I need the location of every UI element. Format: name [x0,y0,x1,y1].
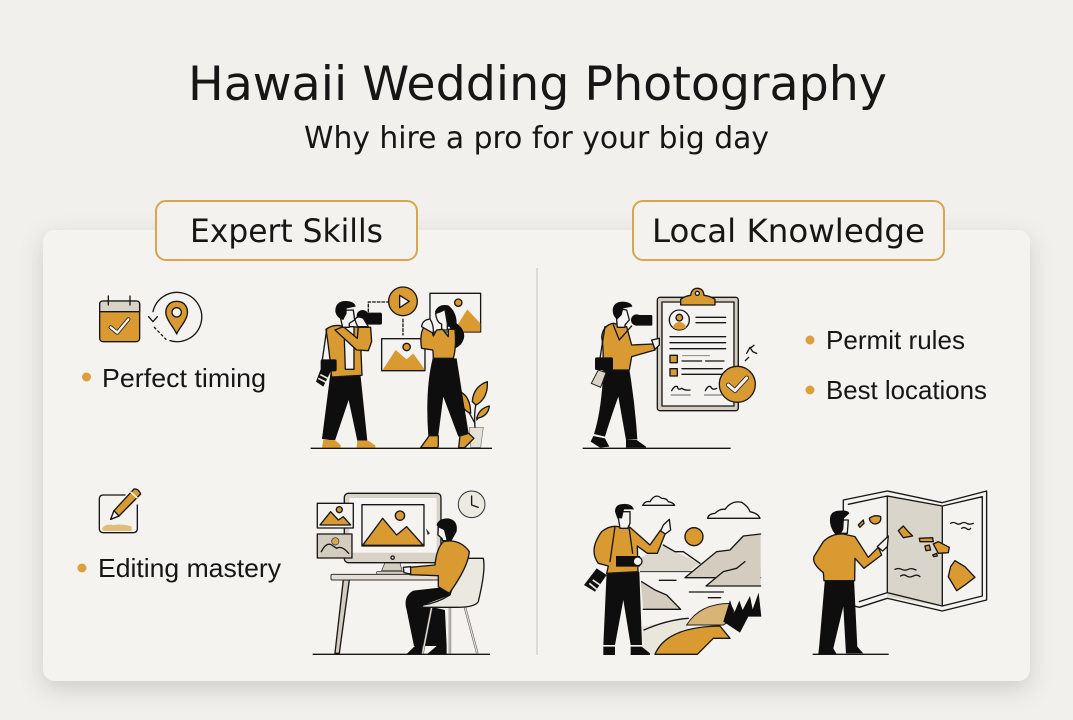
title: Hawaii Wedding Photography [188,57,887,112]
seated person legs [406,587,450,654]
icon: calendar with check [100,296,140,342]
photo frame: front [382,339,425,371]
illustration: photographer with permit clipboard [583,288,757,448]
bullet: Perfect timing: Perfect timing [102,363,266,393]
bullet: Best locations: Best locations [826,375,987,405]
thumbnail: photo one [317,503,353,528]
chair [422,558,484,653]
subtitle: Why hire a pro for your big day [304,121,769,156]
illustration: photographer pointing at landscape [584,496,761,655]
landscape [640,496,761,654]
woman [421,305,474,448]
thumbnail: photo two [317,534,352,558]
plant [460,382,489,447]
icon: pencil and paper [99,489,141,533]
folded map [843,491,987,611]
bullet: Editing mastery: Editing mastery [98,553,281,583]
panel: main card [43,230,1030,681]
man [814,511,888,654]
photographer [591,302,659,448]
desk [331,574,439,653]
icon: location pin with circular arrow [149,292,202,342]
islands [858,516,975,591]
pointing photographer [584,504,671,655]
illustration: couple photographer [311,287,492,448]
clipboard [657,288,738,411]
play button [389,287,417,316]
heading: Expert Skills: Expert Skills [190,212,383,250]
seated person torso [403,518,469,593]
clock [458,491,485,518]
man with camera [316,301,382,448]
illustration: editor at desk [313,491,490,654]
check badge [719,366,755,402]
monitor [344,493,441,574]
illustration: man reading Hawaii map [813,491,987,654]
heading: Expert Skills [156,201,417,260]
heading: Local Knowledge [633,201,944,260]
bullet: Permit rules: Permit rules [826,325,965,355]
photo frame: back [430,293,481,332]
heading: Local Knowledge: Local Knowledge [652,212,925,250]
